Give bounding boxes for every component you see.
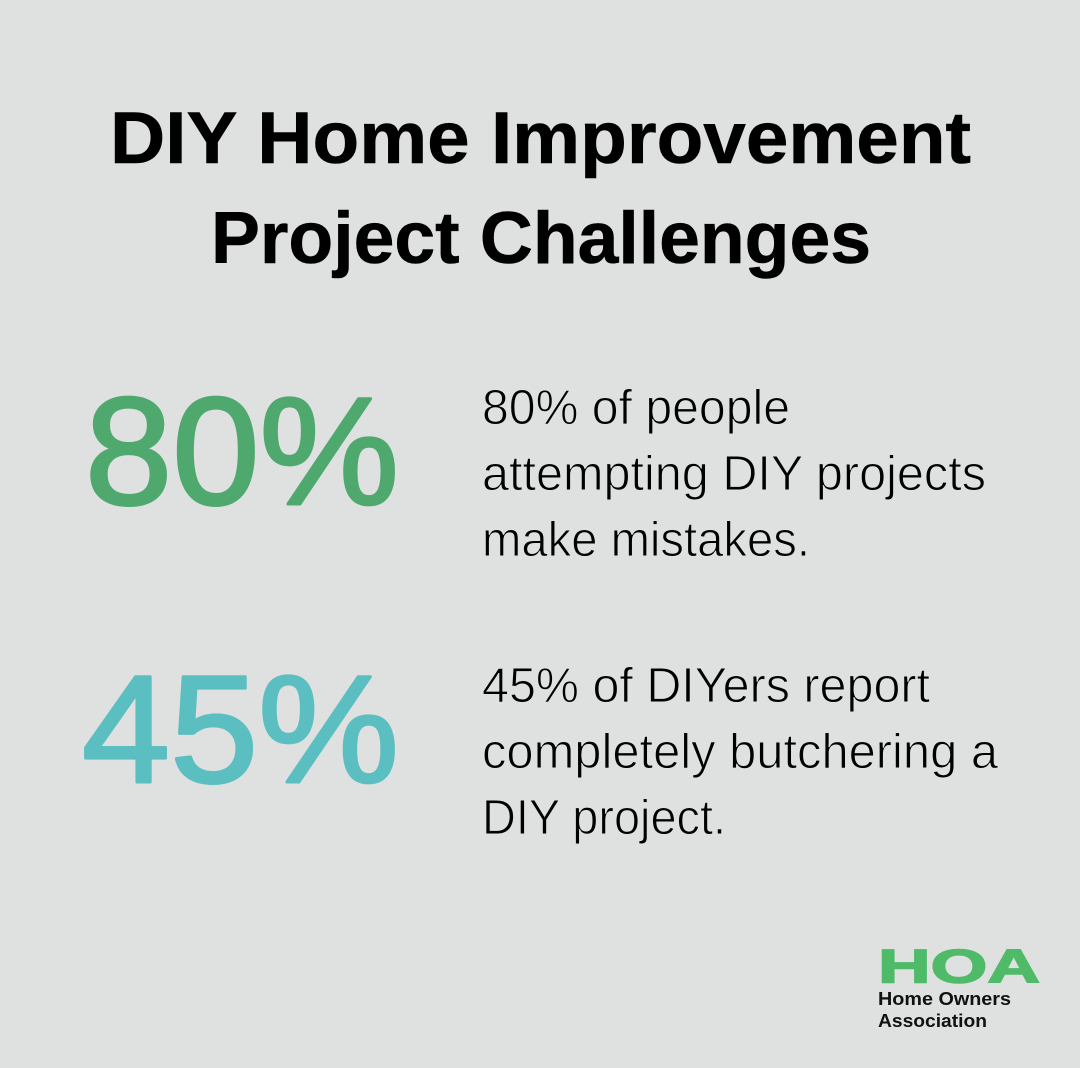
logo mark HOA: HOA — [878, 940, 1040, 992]
stat number 80%: 80% — [85, 366, 399, 537]
logo: HOA Home Owners Association — [878, 940, 1040, 1031]
stat description 45%: DIY project. — [482, 791, 726, 845]
stat description 45% — [482, 659, 999, 845]
stat description 80% — [482, 381, 986, 567]
logo wordmark: Association — [878, 1011, 987, 1031]
stat: 80% — [85, 366, 986, 567]
stat description 45%: completely butchering a — [482, 725, 999, 779]
stat description 80%: make mistakes. — [482, 513, 810, 567]
stat number 45%: 45% — [82, 644, 399, 815]
stat: 45% — [82, 644, 999, 845]
title: Project Challenges — [211, 198, 871, 279]
stat description 80%: attempting DIY projects — [482, 447, 986, 501]
logo wordmark — [878, 989, 1011, 1031]
stat description 80%: 80% of people — [482, 381, 790, 435]
title — [110, 98, 971, 279]
title: DIY Home Improvement — [110, 98, 971, 179]
stat description 45%: 45% of DIYers report — [482, 659, 930, 713]
logo wordmark: Home Owners — [878, 989, 1011, 1009]
